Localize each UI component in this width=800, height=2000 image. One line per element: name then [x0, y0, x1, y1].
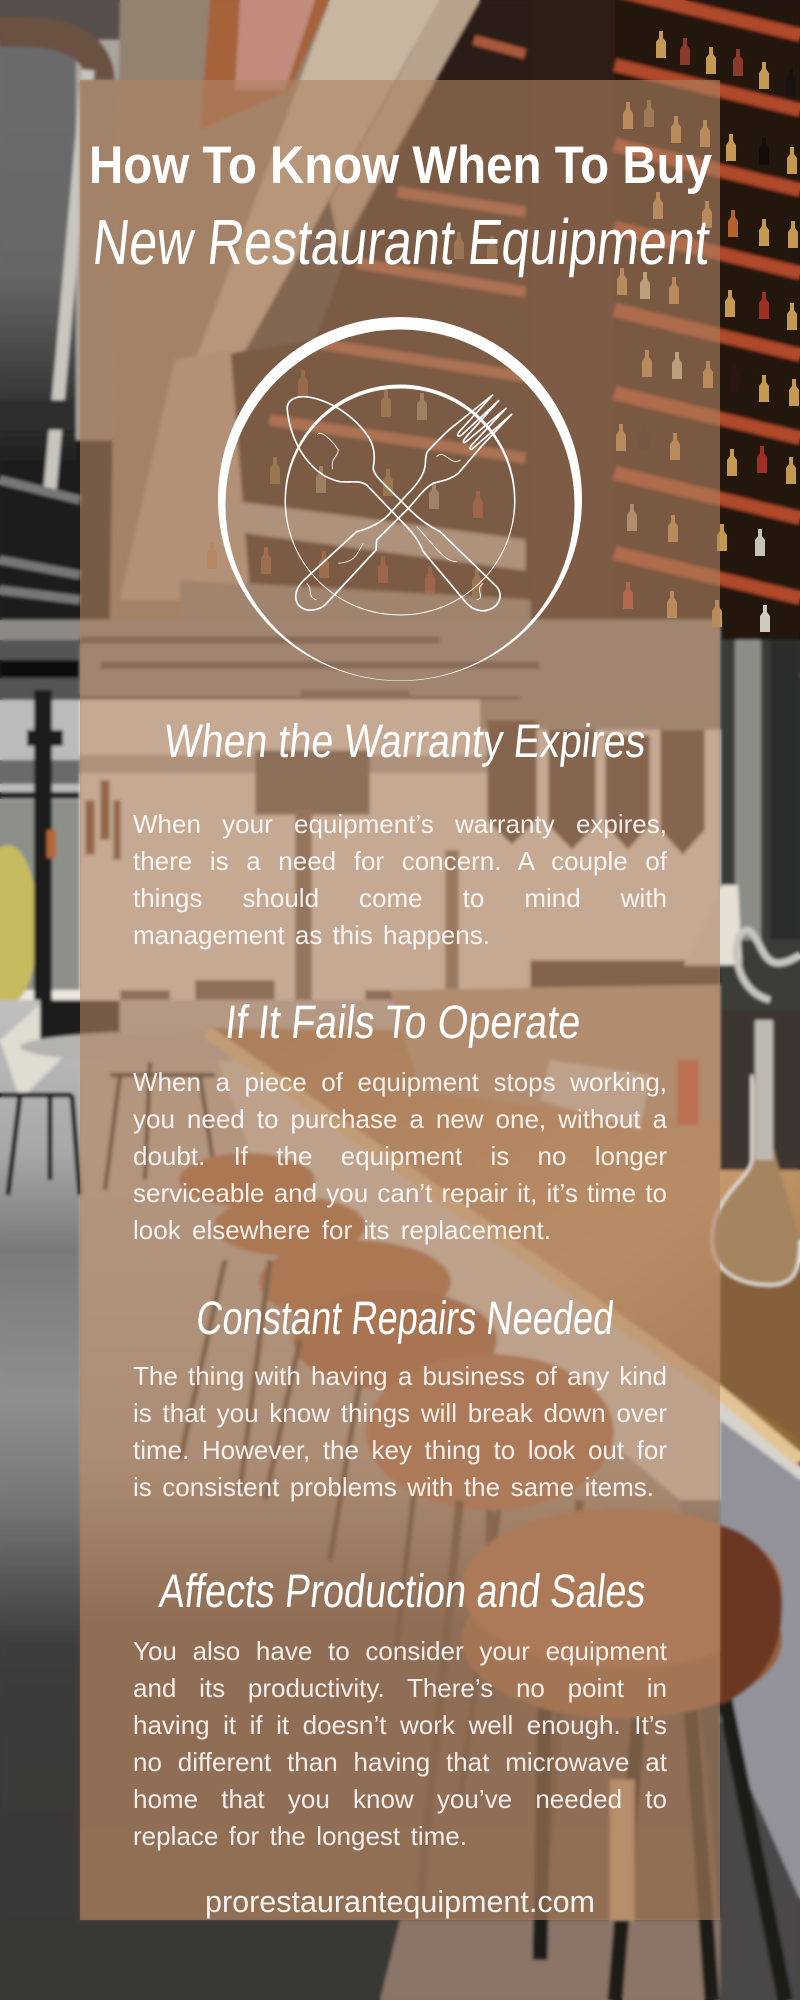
footer url: prorestaurantequipment.com: [205, 1885, 595, 1919]
icon: plate with crossed spoon and fork: [218, 317, 582, 681]
text block: production and sales body: no different than having that microwave at: [133, 1747, 667, 1777]
text block: fails to operate body: serviceable and you can’t repair it, it’s time to: [133, 1178, 667, 1208]
text block: production and sales body: replace for the longest time.: [133, 1821, 467, 1851]
text block: warranty body: there is a need for concern. A couple of: [133, 846, 667, 876]
text block: fails to operate body: When a piece of equipment stops working,: [133, 1067, 667, 1097]
text block: warranty body: [133, 809, 667, 950]
heading: when the warranty expires: When the Warranty Expires: [162, 714, 649, 767]
icon: cutlery flourishes: [307, 433, 483, 600]
icon: fork: [296, 395, 512, 610]
text block: constant repairs body: [133, 1361, 667, 1502]
title: [89, 136, 713, 278]
text block: fails to operate body: you need to purchase a new one, without a: [133, 1104, 667, 1134]
text block: warranty body: things should come to mind with: [133, 883, 667, 913]
text block: production and sales body: home that you know you’ve needed to: [133, 1784, 667, 1814]
panel: translucent brown content panel: [80, 80, 720, 1920]
heading: if it fails to operate: If It Fails To Operate: [223, 995, 584, 1048]
text block: constant repairs body: is consistent problems with the same items.: [133, 1472, 654, 1502]
text block: fails to operate body: look elsewhere for its replacement.: [133, 1215, 551, 1245]
text block: warranty body: management as this happens.: [133, 920, 490, 950]
bar back bottles: [207, 31, 799, 632]
text block: production and sales body: [133, 1636, 667, 1851]
icon: spoon: [287, 397, 500, 611]
text block: warranty body: When your equipment’s warranty expires,: [133, 809, 667, 839]
text block: constant repairs body: The thing with having a business of any kind: [133, 1361, 667, 1391]
text block: constant repairs body: is that you know things will break down over: [133, 1398, 667, 1428]
text block: production and sales body: and its productivity. There’s no point in: [133, 1673, 667, 1703]
heading: affects production and sales: Affects Production and Sales: [157, 1564, 649, 1617]
text block: production and sales body: having it if it doesn’t work well enough. It’s: [133, 1710, 667, 1740]
text block: constant repairs body: time. However, the key thing to look out for: [133, 1435, 667, 1465]
text block: fails to operate body: doubt. If the equipment is no longer: [133, 1141, 667, 1171]
text block: fails to operate body: [133, 1067, 667, 1245]
heading: constant repairs needed: Constant Repairs Needed: [194, 1291, 617, 1344]
title: How To Know When To Buy: [89, 136, 712, 195]
text block: production and sales body: You also have to consider your equipment: [133, 1636, 667, 1666]
